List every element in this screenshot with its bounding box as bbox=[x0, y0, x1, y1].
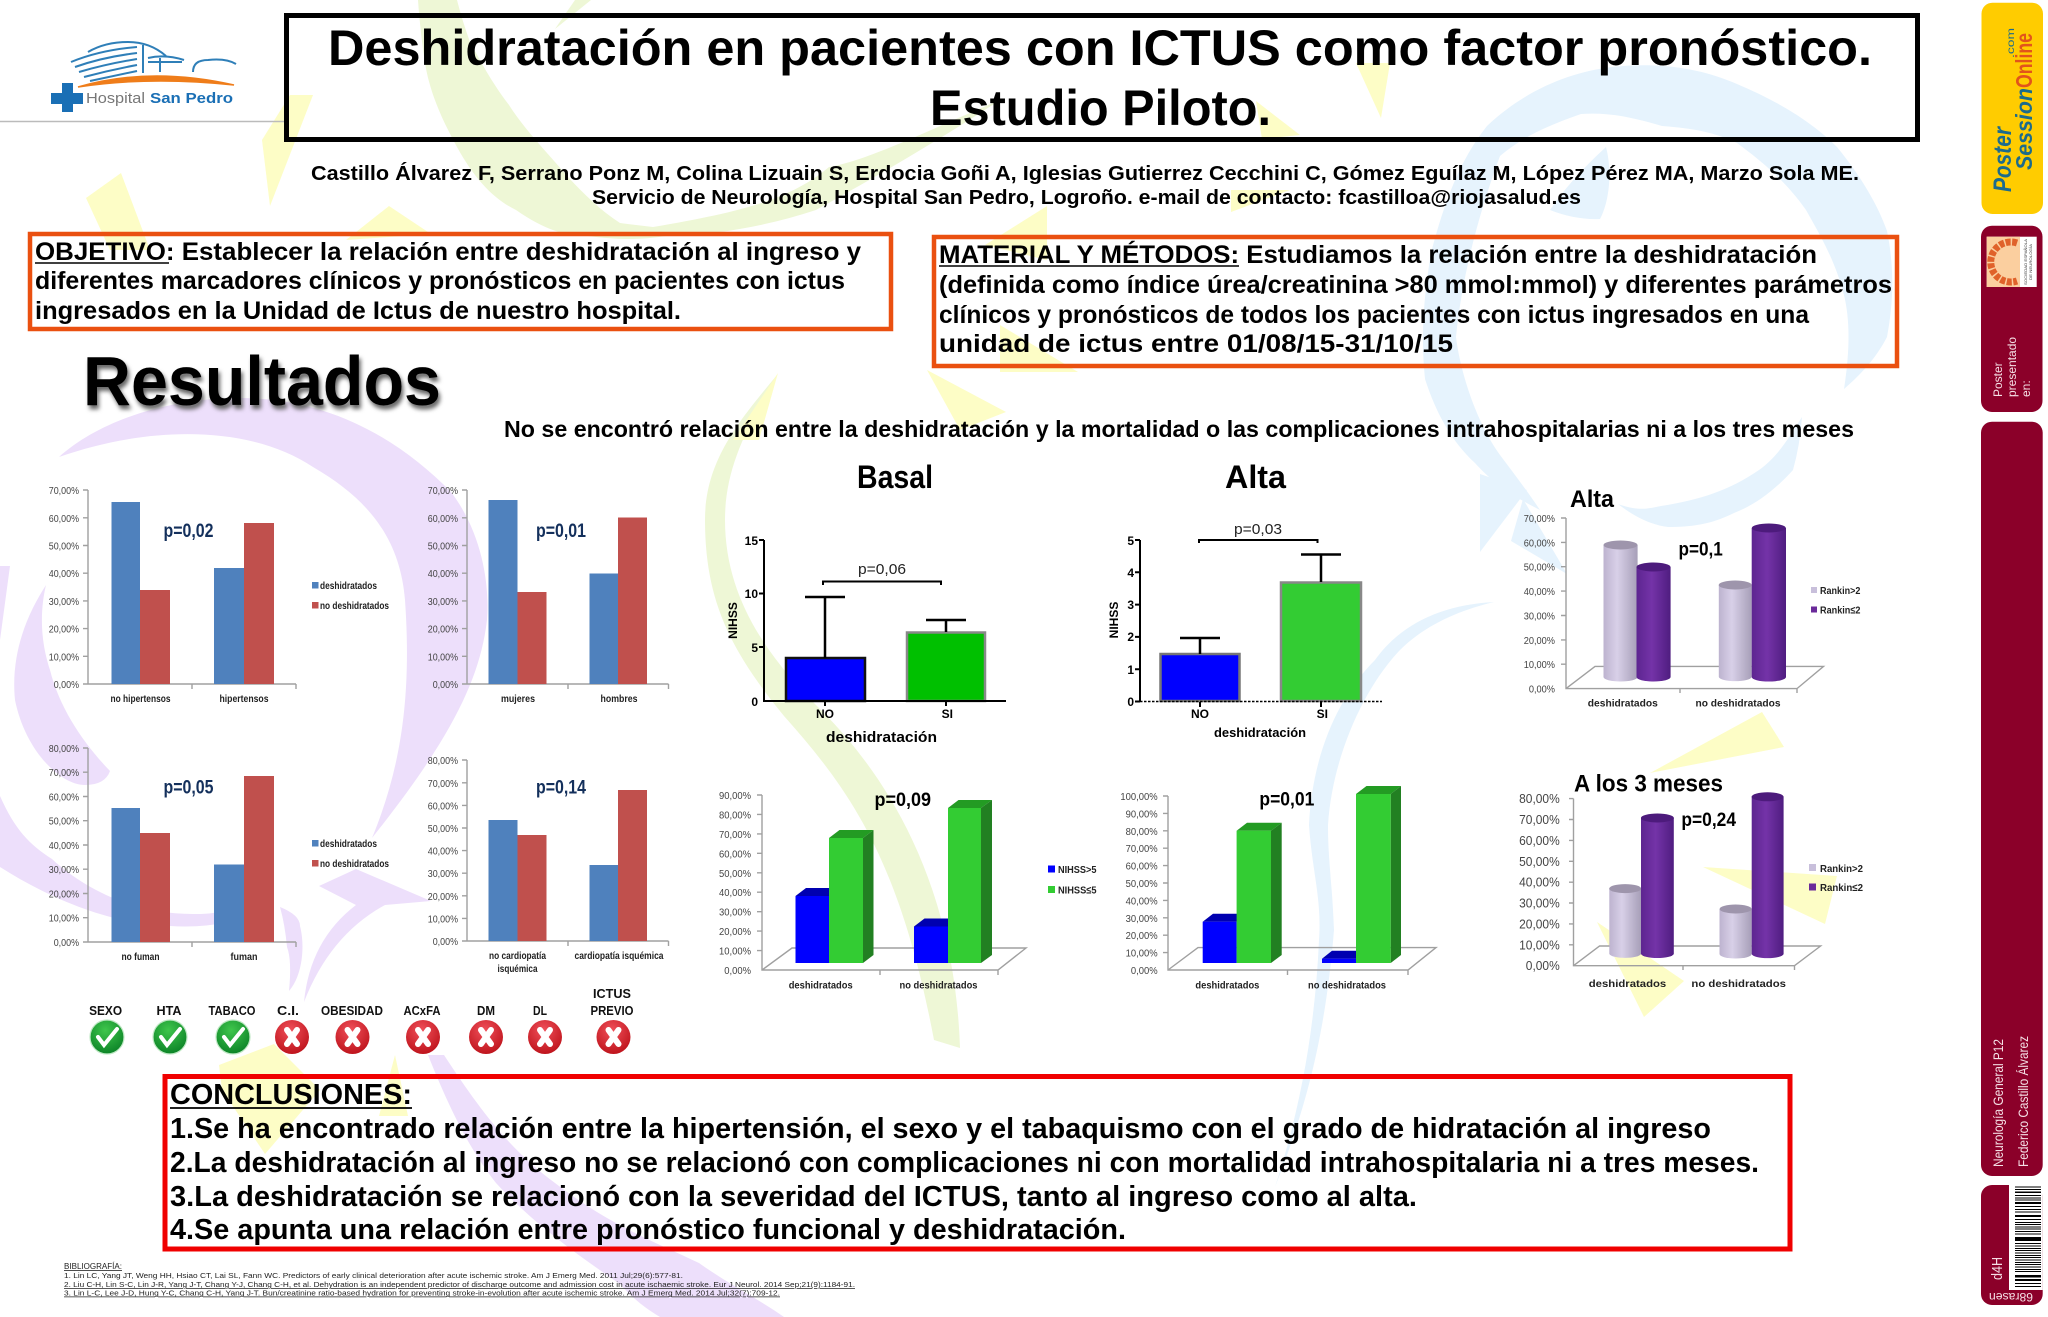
chart: cardiopatia isquemica: 40,00% bbox=[428, 846, 458, 858]
chart: hipertensos: no deshidratados bbox=[320, 600, 389, 612]
icon row: factores: SEXO bbox=[89, 1003, 122, 1018]
chart: NIHSS 3D alta: 20,00% bbox=[1126, 931, 1158, 942]
chart: NIHSS basal: p=0,06 bbox=[858, 561, 906, 578]
panel: conclusiones bbox=[165, 1076, 1790, 1249]
chart: hipertensos: 60,00% bbox=[49, 513, 79, 525]
chart: hipertensos: 40,00% bbox=[49, 569, 79, 580]
chart: rankin alta: 70,00% bbox=[1524, 514, 1555, 525]
chart: NIHSS 3D basal: 0,00% bbox=[724, 966, 751, 977]
panel: conclusiones: 2.La deshidratación al ingreso no se relacionó con complicaciones ni con mortalidad intrahospitalaria ni a tres meses. bbox=[170, 1147, 1759, 1179]
chart: NIHSS 3D alta: 10,00% bbox=[1126, 948, 1158, 960]
icon row: factores bbox=[89, 986, 634, 1054]
chart: sexo: 60,00% bbox=[428, 513, 458, 525]
panel: material y metodos: clínicos y pronósticos de todos los pacientes con ictus ingresados en una bbox=[939, 301, 1810, 329]
chart: hipertensos: p=0,02 bbox=[164, 521, 214, 542]
sidebar: codigo de barras: 68rasen bbox=[1989, 1290, 2033, 1304]
icon row: factores: DM bbox=[477, 1003, 495, 1018]
chart: rankin 3 meses: p=0,24 bbox=[1681, 810, 1736, 831]
chart: NIHSS basal: NO bbox=[816, 707, 834, 721]
chart: rankin alta: Rankin≤2 bbox=[1820, 604, 1861, 616]
chart: cardiopatia isquemica: no cardiopatía bbox=[489, 950, 546, 962]
title bbox=[286, 16, 1918, 140]
chart: NIHSS basal bbox=[726, 534, 1006, 746]
chart: rankin alta: p=0,1 bbox=[1678, 540, 1723, 561]
icon row: factores: C.I. bbox=[277, 1003, 299, 1018]
icon row: factores: ACxFA bbox=[404, 1003, 441, 1018]
chart: fuman: 50,00% bbox=[49, 816, 79, 828]
bibliografia: 3. Lin L-C, Lee J-D, Hung Y-C, Chang C-H, Yang J-T. Bun/creatinine ratio-based hydration for preventing stroke-in-evolution after acute ischemic stroke. Am J Emerg Med. 2014 Jul;32(7):709-12. bbox=[64, 1288, 780, 1298]
chart: NIHSS alta: deshidratación bbox=[1214, 725, 1306, 740]
chart: NIHSS 3D basal: 30,00% bbox=[719, 907, 751, 919]
chart: fuman: deshidratados bbox=[320, 838, 377, 850]
sidebar: poster presentado: SOCIEDAD ESPAÑOLA bbox=[2023, 239, 2028, 285]
panel: material y metodos: MATERIAL Y MÉTODOS: Estudiamos la relación entre la deshidratación bbox=[939, 240, 1817, 269]
chart: NIHSS basal: deshidratación bbox=[826, 729, 937, 746]
chart: fuman: 0,00% bbox=[54, 937, 79, 949]
heading: resultados: Resultados bbox=[83, 342, 441, 420]
summary sentence: No se encontró relación entre la deshidratación y la mortalidad o las complicaciones intrahospitalarias ni a los tres meses bbox=[504, 416, 1854, 442]
chart: rankin 3 meses: deshidratados bbox=[1589, 978, 1666, 990]
chart: cardiopatia isquemica: 70,00% bbox=[428, 778, 458, 790]
chart: NIHSS 3D basal: NIHSS≤5 bbox=[1058, 884, 1097, 896]
chart: hipertensos: 20,00% bbox=[49, 624, 79, 636]
chart: sexo: p=0,01 bbox=[536, 521, 586, 542]
chart: NIHSS 3D alta: 50,00% bbox=[1126, 879, 1158, 890]
chart: NIHSS 3D basal: 20,00% bbox=[719, 927, 751, 938]
icon row: factores: PREVIO bbox=[590, 1003, 634, 1018]
chart: cardiopatia isquemica: 60,00% bbox=[428, 801, 458, 813]
chart: fuman: fuman bbox=[230, 951, 258, 963]
sidebar: poster presentado: presentado bbox=[2005, 337, 2019, 397]
panel: material y metodos: (definida como índice úrea/creatinina >80 mmol:mmol) y diferentes parámetros bbox=[939, 271, 1892, 299]
chart: hipertensos bbox=[49, 485, 389, 705]
authors and affiliation: Castillo Álvarez F, Serrano Ponz M, Colina Lizuain S, Erdocia Goñi A, Iglesias Gutierrez Cecchini C, Gómez Eguílaz M, López Pérez MA, Marzo Sola ME. bbox=[311, 162, 1859, 185]
chart: hipertensos: hipertensos bbox=[220, 693, 269, 705]
panel: conclusiones: CONCLUSIONES: bbox=[170, 1079, 412, 1111]
sidebar: autor y categoria bbox=[1981, 422, 2043, 1176]
chart: rankin 3 meses: 40,00% bbox=[1519, 875, 1560, 890]
chart: NIHSS alta: 4 bbox=[1127, 566, 1134, 580]
sidebar: poster session online: .com bbox=[2006, 28, 2017, 58]
chart: NIHSS basal: NIHSS bbox=[726, 602, 740, 639]
chart: NIHSS 3D basal: p=0,09 bbox=[874, 790, 931, 811]
heading: alta: Alta bbox=[1225, 459, 1286, 495]
sidebar: poster session online: Poster bbox=[1989, 126, 2017, 192]
sidebar: poster presentado: en: bbox=[2019, 380, 2033, 397]
panel: conclusiones: 1.Se ha encontrado relación entre la hipertensión, el sexo y el tabaquismo con el grado de hidratación al ingreso bbox=[170, 1113, 1711, 1145]
chart: sexo: 20,00% bbox=[428, 624, 458, 636]
bibliografia: BIBLIOGRAFÍA: bbox=[64, 1262, 122, 1271]
chart: NIHSS basal: SI bbox=[942, 707, 953, 721]
chart: hipertensos: 50,00% bbox=[49, 541, 79, 553]
chart: rankin 3 meses: Rankin>2 bbox=[1820, 863, 1863, 875]
chart: hipertensos: no hipertensos bbox=[110, 693, 171, 705]
chart: NIHSS 3D alta: 60,00% bbox=[1126, 861, 1158, 873]
chart: NIHSS 3D alta: 0,00% bbox=[1131, 966, 1158, 977]
sidebar: autor y categoria: Neurología General P12 bbox=[1990, 1039, 2006, 1167]
chart: rankin 3 meses: 30,00% bbox=[1519, 896, 1560, 911]
chart: hipertensos: 0,00% bbox=[54, 679, 79, 691]
chart: NIHSS alta: 0 bbox=[1127, 695, 1134, 709]
chart: NIHSS 3D alta: 40,00% bbox=[1126, 896, 1158, 908]
chart: hipertensos: 10,00% bbox=[49, 652, 79, 664]
bibliografia: 1. Lin LC, Yang JT, Weng HH, Hsiao CT, Lai SL, Fann WC. Predictors of early clinical deterioration after acute ischemic stroke. Am J Emerg Med. 2011 Jul;29(6):577-81. bbox=[64, 1271, 683, 1280]
chart: rankin 3 meses: Rankin≤2 bbox=[1820, 882, 1863, 894]
chart: NIHSS 3D alta: 90,00% bbox=[1126, 809, 1158, 821]
chart: fuman: 10,00% bbox=[49, 913, 79, 925]
chart: hipertensos: 70,00% bbox=[49, 485, 79, 497]
icon row: factores: OBESIDAD bbox=[321, 1003, 383, 1018]
chart: rankin 3 meses: 10,00% bbox=[1519, 938, 1560, 952]
heading: alta rankin: Alta bbox=[1570, 486, 1615, 513]
chart: sexo: hombres bbox=[600, 693, 638, 705]
chart: NIHSS 3D basal: 70,00% bbox=[719, 829, 751, 841]
icon row: factores: TABACO bbox=[208, 1003, 256, 1018]
chart: NIHSS 3D basal bbox=[719, 790, 1097, 992]
chart: rankin alta: 20,00% bbox=[1524, 635, 1555, 647]
chart: NIHSS 3D alta: no deshidratados bbox=[1308, 980, 1386, 992]
panel: objetivo bbox=[30, 234, 891, 329]
chart: NIHSS 3D basal: 50,00% bbox=[719, 868, 751, 880]
chart: rankin alta: 10,00% bbox=[1524, 660, 1555, 671]
chart: rankin 3 meses bbox=[1519, 792, 1863, 990]
chart: fuman: 80,00% bbox=[49, 743, 79, 755]
panel: conclusiones: 4.Se apunta una relación entre pronóstico funcional y deshidratación. bbox=[170, 1214, 1126, 1246]
chart: fuman: 40,00% bbox=[49, 840, 79, 852]
chart: sexo: mujeres bbox=[501, 693, 535, 705]
chart: sexo: 10,00% bbox=[428, 652, 458, 664]
icon row: factores: HTA bbox=[156, 1003, 182, 1018]
chart: fuman: 20,00% bbox=[49, 889, 79, 901]
panel: objetivo: diferentes marcadores clínicos y pronósticos en pacientes con ictus bbox=[35, 267, 845, 295]
chart: fuman: 70,00% bbox=[49, 768, 79, 779]
chart: rankin alta: 60,00% bbox=[1524, 538, 1555, 550]
chart: rankin alta: no deshidratados bbox=[1696, 697, 1781, 709]
heading: a los 3 meses: A los 3 meses bbox=[1574, 770, 1723, 797]
chart: hipertensos: 30,00% bbox=[49, 596, 79, 608]
hospital logo: Hospital bbox=[86, 90, 145, 107]
sidebar: codigo de barras: d4H bbox=[1989, 1257, 2006, 1280]
chart: cardiopatia isquemica: isquémica bbox=[498, 963, 538, 975]
bibliografia bbox=[64, 1262, 855, 1298]
chart: NIHSS 3D basal: 90,00% bbox=[719, 791, 751, 802]
sidebar: codigo de barras bbox=[1981, 1185, 2043, 1305]
chart: rankin 3 meses: 20,00% bbox=[1519, 917, 1560, 932]
chart: rankin 3 meses: 60,00% bbox=[1519, 834, 1560, 848]
chart: NIHSS 3D alta: 30,00% bbox=[1126, 913, 1158, 925]
chart: NIHSS basal: 10 bbox=[745, 587, 758, 601]
chart: NIHSS 3D basal: 60,00% bbox=[719, 849, 751, 860]
chart: rankin alta: Rankin>2 bbox=[1820, 585, 1861, 597]
chart: fuman bbox=[49, 743, 389, 963]
icon row: factores: DL bbox=[533, 1003, 547, 1018]
chart: cardiopatia isquemica: 0,00% bbox=[433, 936, 458, 948]
title: Estudio Piloto. bbox=[930, 80, 1271, 136]
chart: hipertensos: deshidratados bbox=[320, 580, 377, 592]
chart: NIHSS alta: 3 bbox=[1127, 598, 1134, 612]
panel: conclusiones: 3.La deshidratación se relacionó con la severidad del ICTUS, tanto al ingreso como al alta. bbox=[170, 1181, 1417, 1213]
sidebar: poster presentado: Poster bbox=[1991, 362, 2005, 397]
chart: NIHSS 3D basal: NIHSS>5 bbox=[1058, 864, 1097, 876]
chart: NIHSS basal: 15 bbox=[745, 534, 758, 548]
chart: rankin 3 meses: no deshidratados bbox=[1691, 978, 1786, 990]
chart: fuman: no fuman bbox=[122, 951, 160, 963]
chart: cardiopatia isquemica bbox=[428, 755, 668, 975]
chart: cardiopatia isquemica: 30,00% bbox=[428, 869, 458, 880]
hospital logo: San Pedro bbox=[150, 90, 233, 107]
panel: material y metodos bbox=[934, 237, 1897, 366]
chart: NIHSS 3D alta bbox=[1120, 786, 1436, 992]
chart: rankin 3 meses: 0,00% bbox=[1526, 959, 1560, 973]
chart: NIHSS 3D alta: 70,00% bbox=[1126, 844, 1158, 855]
chart: NIHSS basal: 0 bbox=[751, 695, 758, 709]
chart: NIHSS 3D basal: deshidratados bbox=[789, 980, 853, 992]
sidebar: poster presentado bbox=[1981, 226, 2042, 412]
authors and affiliation bbox=[311, 162, 1859, 209]
hospital logo bbox=[0, 42, 284, 122]
sidebar: poster session online: Online bbox=[2011, 33, 2037, 88]
sidebar: poster session online: Session bbox=[2011, 88, 2037, 170]
authors and affiliation: Servicio de Neurología, Hospital San Pedro, Logroño. e-mail de contacto: fcastilloa@riojasalud.es bbox=[592, 187, 1581, 209]
chart: NIHSS alta: 2 bbox=[1127, 630, 1134, 644]
chart: cardiopatia isquemica: 80,00% bbox=[428, 755, 458, 767]
sidebar: poster session online bbox=[1982, 3, 2043, 214]
chart: rankin alta: 50,00% bbox=[1524, 562, 1555, 574]
chart: NIHSS alta bbox=[1107, 521, 1382, 740]
chart: sexo: 50,00% bbox=[428, 541, 458, 553]
panel: objetivo: OBJETIVO: Establecer la relación entre deshidratación al ingreso y bbox=[35, 238, 861, 266]
chart: rankin 3 meses: 50,00% bbox=[1519, 855, 1560, 869]
chart: NIHSS 3D alta: deshidratados bbox=[1195, 980, 1260, 992]
chart: cardiopatia isquemica: 10,00% bbox=[428, 914, 458, 926]
chart: sexo: 30,00% bbox=[428, 596, 458, 608]
chart: NIHSS 3D basal: 10,00% bbox=[719, 946, 751, 958]
chart: NIHSS 3D basal: 40,00% bbox=[719, 888, 751, 899]
chart: NIHSS 3D alta: p=0,01 bbox=[1259, 790, 1315, 810]
chart: sexo bbox=[428, 485, 668, 705]
chart: rankin alta: 30,00% bbox=[1524, 611, 1555, 623]
chart: sexo: 70,00% bbox=[428, 485, 458, 497]
chart: fuman: 30,00% bbox=[49, 865, 79, 876]
bibliografia: 2. Liu C-H, Lin S-C, Lin J-R, Yang J-T, Chang Y-J, Chang C-H, et al. Dehydration is an independent predictor of discharge outcome and admission cost in acute ischaemic stroke. Eur J Neurol. 2014 Sep;21(9):1184-91. bbox=[64, 1280, 855, 1289]
chart: rankin 3 meses: 70,00% bbox=[1519, 813, 1560, 827]
heading: basal: Basal bbox=[857, 459, 933, 495]
chart: rankin alta: 40,00% bbox=[1524, 587, 1555, 598]
chart: cardiopatia isquemica: p=0,14 bbox=[536, 778, 586, 798]
chart: NIHSS 3D basal: 80,00% bbox=[719, 810, 751, 822]
chart: NIHSS 3D alta: 80,00% bbox=[1126, 826, 1158, 838]
chart: NIHSS 3D basal: no deshidratados bbox=[900, 980, 978, 992]
chart: sexo: 0,00% bbox=[433, 679, 458, 691]
chart: cardiopatia isquemica: 50,00% bbox=[428, 823, 458, 835]
chart: fuman: no deshidratados bbox=[320, 858, 389, 870]
chart: rankin alta: 0,00% bbox=[1529, 684, 1555, 696]
panel: objetivo: ingresados en la Unidad de Ictus de nuestro hospital. bbox=[35, 297, 681, 325]
chart: fuman: 60,00% bbox=[49, 792, 79, 804]
chart: fuman: p=0,05 bbox=[164, 778, 214, 798]
sidebar: poster presentado: DE NEUROLOGÍA bbox=[2028, 244, 2033, 280]
chart: NIHSS alta: NO bbox=[1191, 707, 1209, 721]
chart: NIHSS basal: 5 bbox=[751, 641, 758, 655]
chart: rankin 3 meses: 80,00% bbox=[1519, 792, 1560, 806]
chart: cardiopatia isquemica: cardiopatía isquémica bbox=[574, 950, 664, 962]
title: Deshidratación en pacientes con ICTUS como factor pronóstico. bbox=[328, 20, 1872, 76]
chart: NIHSS alta: 1 bbox=[1127, 663, 1134, 677]
chart: NIHSS alta: NIHSS bbox=[1107, 602, 1121, 638]
chart: cardiopatia isquemica: 20,00% bbox=[428, 891, 458, 903]
chart: NIHSS alta: SI bbox=[1317, 707, 1328, 721]
chart: NIHSS alta: 5 bbox=[1127, 534, 1134, 548]
sidebar: autor y categoria: Federico Castillo Álvarez bbox=[2015, 1036, 2031, 1167]
icon row: factores: ICTUS bbox=[593, 986, 631, 1001]
panel: material y metodos: unidad de ictus entre 01/08/15-31/10/15 bbox=[939, 330, 1453, 358]
chart: rankin alta: deshidratados bbox=[1588, 697, 1658, 709]
chart: sexo: 40,00% bbox=[428, 569, 458, 580]
chart: rankin alta bbox=[1524, 514, 1861, 709]
chart: NIHSS alta: p=0,03 bbox=[1234, 521, 1282, 538]
chart: NIHSS 3D alta: 100,00% bbox=[1120, 792, 1158, 803]
